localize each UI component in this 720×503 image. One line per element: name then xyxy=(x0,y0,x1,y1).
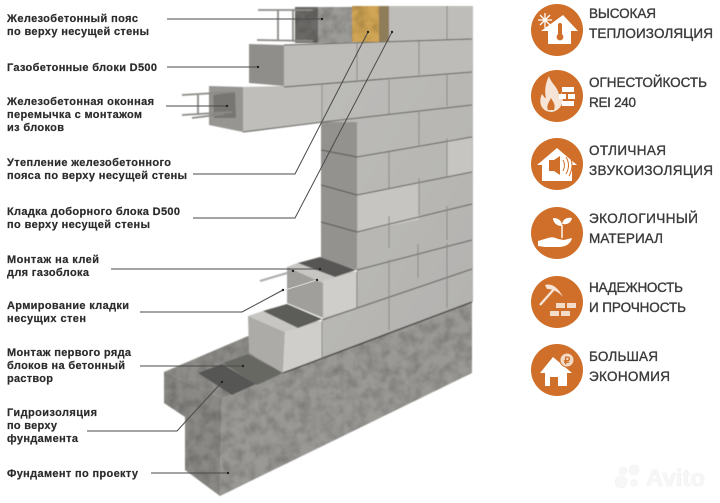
benefit labels: ВЫСОКАЯ xyxy=(589,6,656,21)
label: extra block xyxy=(7,206,180,231)
wall left return face xyxy=(321,122,357,270)
label: lintel: перемычка с монтажом xyxy=(7,109,142,121)
upper course end block xyxy=(249,39,472,86)
lower step block xyxy=(248,304,322,373)
benefit labels: ОГНЕСТОЙКОСТЬ xyxy=(589,75,707,90)
leader lines xyxy=(87,18,393,474)
label: reinforcement xyxy=(7,300,129,325)
watermark xyxy=(615,465,705,492)
label: belt insulation xyxy=(7,157,187,182)
benefit labels xyxy=(589,6,713,384)
label: glue: для газоблока xyxy=(7,267,90,279)
insulation xyxy=(352,6,389,42)
label: belt: Железобетонный пояс xyxy=(6,13,138,25)
label: first row: блоков на бетонный xyxy=(7,360,125,372)
concrete belt xyxy=(295,7,352,43)
label: first row xyxy=(7,347,132,385)
rebar xyxy=(182,10,313,281)
label: belt insulation: Утепление железобетонного xyxy=(7,157,171,169)
benefit labels: REI 240 xyxy=(589,95,636,110)
icon: savings: ₽ xyxy=(564,356,571,367)
icon: fire resistance xyxy=(531,70,583,122)
icon: sound insulation xyxy=(531,138,583,190)
benefit labels: МАТЕРИАЛ xyxy=(589,231,663,246)
label: belt insulation: пояса по верху несущей стены xyxy=(7,170,187,182)
benefit labels: ЭКОНОМИЯ xyxy=(589,369,670,384)
label: glue: Монтаж на клей xyxy=(7,254,99,266)
watermark: Avito xyxy=(646,465,705,492)
label: reinforcement: несущих стен xyxy=(7,313,86,325)
icon: reliability xyxy=(531,276,583,328)
left labels xyxy=(6,13,187,480)
icon: savings xyxy=(531,344,583,396)
label: waterproofing xyxy=(7,407,97,445)
benefit labels: НАДЕЖНОСТЬ xyxy=(589,280,683,295)
label: waterproofing: по верху xyxy=(7,420,58,432)
label: waterproofing: Гидроизоляция xyxy=(7,407,97,419)
lighter blocks xyxy=(358,137,472,232)
upper step block xyxy=(287,257,356,318)
label: glue xyxy=(7,254,99,279)
label: lintel: Железобетонная оконная xyxy=(6,96,154,108)
label: reinforcement: Армирование кладки xyxy=(7,300,129,312)
label: first row: раствор xyxy=(7,373,53,385)
label: lintel xyxy=(6,96,154,134)
waterproofing strip xyxy=(198,364,256,395)
benefits xyxy=(531,4,713,396)
icon: eco material xyxy=(531,207,583,259)
lintel xyxy=(209,85,323,132)
icon: heat insulation xyxy=(531,4,583,56)
label: foundation: Фундамент по проекту xyxy=(7,468,139,480)
label: first row: Монтаж первого ряда xyxy=(7,347,132,359)
benefit labels: ТЕПЛОИЗОЛЯЦИЯ xyxy=(589,26,713,41)
benefit labels: ЗВУКОИЗОЛЯЦИЯ xyxy=(589,163,713,178)
label: belt xyxy=(6,13,149,38)
main wall face xyxy=(243,6,473,373)
wall joints xyxy=(243,6,472,373)
benefit labels: И ПРОЧНОСТЬ xyxy=(589,300,686,315)
label: lintel: из блоков xyxy=(7,122,64,134)
label: waterproofing: фундамента xyxy=(7,433,79,445)
label: extra block: Кладка доборного блока D500 xyxy=(7,206,180,218)
benefit labels: ОТЛИЧНАЯ xyxy=(589,143,666,158)
label: belt: по верху несущей стены xyxy=(7,26,149,38)
label: extra block: по верху несущей стены xyxy=(7,219,150,231)
benefit labels: ЭКОЛОГИЧНЫЙ xyxy=(589,211,698,226)
benefit labels: БОЛЬШАЯ xyxy=(589,349,658,364)
foundation xyxy=(164,302,472,496)
label: blocks: Газобетонные блоки D500 xyxy=(7,62,157,74)
wall illustration xyxy=(164,6,473,496)
mortar strip xyxy=(223,354,283,385)
